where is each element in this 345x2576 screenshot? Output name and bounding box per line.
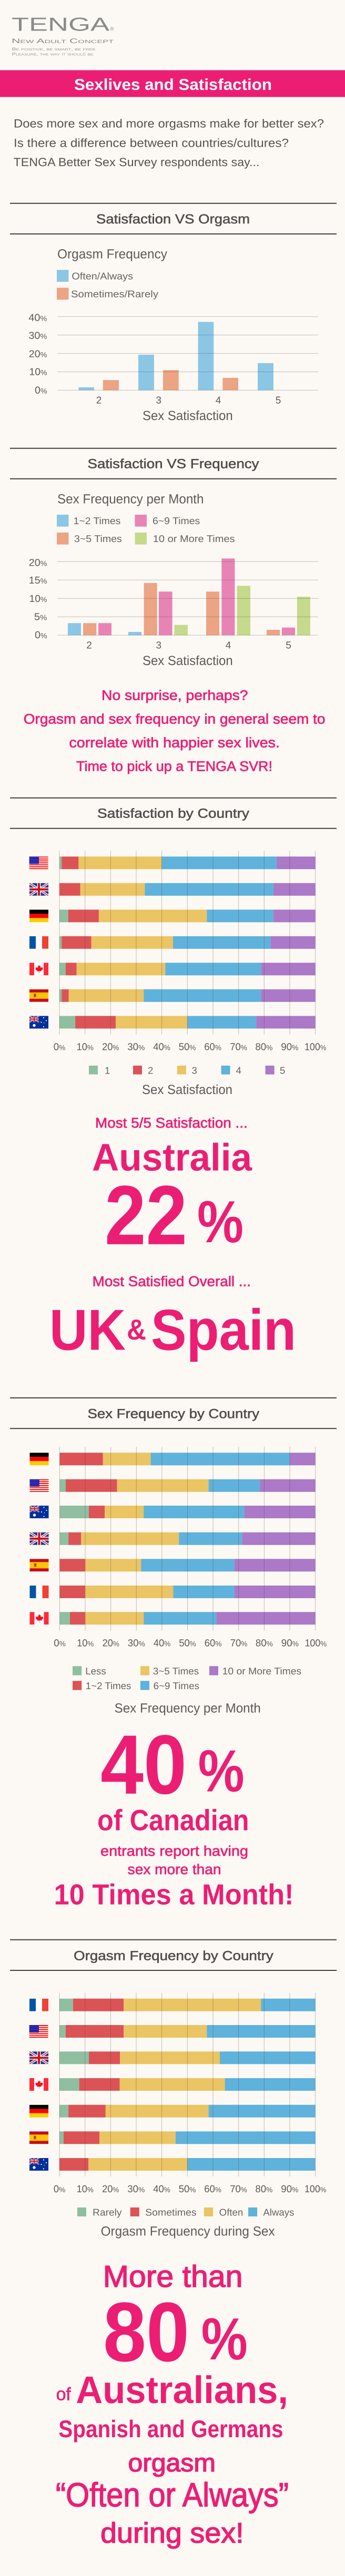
bar chart: 5% (34, 611, 47, 622)
intro text: TENGA Better Sex Survey respondents say... (14, 156, 260, 169)
callout: more than 80%: 80 (103, 2285, 189, 2379)
callout: 40% of Canadian: of Canadian (97, 1804, 249, 1837)
bar chart: 5 (286, 640, 291, 651)
callout: 40% of Canadian: 10 Times a Month! (54, 1878, 294, 1910)
axis labels: 70% (230, 1638, 247, 1649)
axis labels: 20% (102, 1042, 119, 1053)
callout: 40% of Canadian: % (198, 1738, 245, 1804)
callout: Australia 22%: % (197, 1189, 243, 1255)
legend: 10 or More Times (153, 533, 235, 544)
legend: 4 (236, 1065, 241, 1076)
stacked bar chart (29, 1993, 327, 2239)
bar chart: 40% (28, 313, 47, 324)
axis labels: 100% (305, 2184, 326, 2195)
row: Canada (29, 1612, 316, 1624)
legend: Orgasm Frequency (57, 247, 167, 262)
axis labels (54, 1638, 327, 1649)
logo: TENGA New Adult Concept: Be positive, be smart, be free (12, 47, 96, 52)
legend (73, 1665, 301, 1691)
bar chart: 0% (35, 385, 47, 396)
legend: Sometimes/Rarely (71, 289, 159, 300)
callout: 40% of Canadian (54, 1718, 294, 1910)
bar chart (28, 313, 318, 423)
callout: UK & Spain: & (127, 1313, 146, 1346)
axis labels: 50% (179, 2184, 196, 2195)
intro text: Does more sex and more orgasms make for better sex? (14, 117, 324, 130)
axis labels: 30% (128, 1638, 145, 1649)
row: Canada (29, 963, 316, 975)
axis labels: 10% (77, 2184, 94, 2195)
stacked bar chart (29, 1447, 327, 1716)
callout: 40% of Canadian: sex more than (128, 1862, 221, 1877)
callout: no surprise: Orgasm and sex frequency in general seem to (24, 711, 325, 727)
axis labels: 0% (54, 1042, 65, 1053)
axis labels: 60% (205, 1638, 221, 1649)
legend: Often (219, 2206, 243, 2217)
bar chart: 0% (35, 630, 47, 641)
legend: 5 (280, 1065, 285, 1076)
logo: TENGA New Adult Concept: New Adult Concept (12, 37, 114, 45)
axis labels: 100% (305, 1042, 326, 1053)
callout: UK & Spain: Most Satisfied Overall ... (93, 1274, 251, 1290)
axis labels: 30% (127, 1042, 145, 1053)
axis labels: 40% (153, 1042, 170, 1053)
bar chart (29, 558, 318, 668)
axis labels: 90% (281, 1042, 298, 1053)
heading: Sex Frequency by Country (87, 1406, 260, 1421)
row: Spain (29, 2131, 316, 2144)
axis labels: 40% (153, 2184, 170, 2195)
row: Australia (29, 1016, 316, 1028)
row: Spain (29, 989, 316, 1002)
callout: no surprise (24, 688, 325, 774)
callout: more than 80%: orgasm (128, 2449, 216, 2477)
callout: Australia 22%: Most 5/5 Satisfaction ... (95, 1115, 248, 1131)
bar chart: 3 (156, 395, 161, 406)
axis labels: 40% (154, 1638, 170, 1649)
panel: Satisfaction by Country (10, 806, 337, 1362)
callout: more than 80%: of (56, 2385, 71, 2405)
row: Germany (29, 909, 316, 922)
bar chart: 20% (29, 558, 47, 569)
axis labels: 70% (230, 1042, 247, 1053)
bar chart: 15% (29, 575, 47, 586)
callout: more than 80%: Australians, (76, 2369, 288, 2411)
row: UK (29, 2051, 316, 2064)
bar chart: 10% (29, 594, 47, 605)
legend: 1~2 Times (86, 1680, 131, 1691)
legend: 2 (148, 1065, 153, 1076)
row: UK (29, 1532, 316, 1545)
callout: no surprise: No surprise, perhaps? (102, 688, 248, 703)
heading: Orgasm Frequency by Country (74, 1948, 273, 1963)
callout: 40% of Canadian: 40 (100, 1718, 187, 1812)
intro text: Is there a difference between countries/cultures? (14, 136, 289, 149)
legend: 6~9 Times (153, 515, 200, 526)
row: France (29, 1586, 316, 1598)
stacked bar chart: Sex Frequency per Month (115, 1701, 261, 1716)
legend: Often/Always (72, 271, 133, 282)
callout: Australia 22%: Australia (92, 1137, 252, 1179)
legend (57, 247, 167, 300)
intro text (14, 117, 324, 169)
row: USA (29, 1479, 316, 1492)
stacked bar chart (29, 851, 327, 1097)
row: Australia (29, 1506, 316, 1518)
legend: Always (263, 2206, 294, 2217)
panel: Satisfaction VS Frequency (10, 457, 337, 668)
row: Germany (29, 2105, 316, 2118)
legend: Rarely (93, 2206, 122, 2217)
row: France (29, 1999, 316, 2011)
legend: 10 or More Times (222, 1665, 301, 1677)
heading: Satisfaction VS Orgasm (96, 212, 250, 227)
panel: Satisfaction VS Orgasm (10, 212, 337, 423)
logo: TENGA New Adult Concept: TENGA (12, 14, 109, 35)
axis labels: 80% (255, 1042, 272, 1053)
panel: Sex Frequency by Country (10, 1406, 337, 1910)
legend: 6~9 Times (154, 1680, 199, 1691)
callout: UK & Spain: UK (49, 1297, 126, 1362)
callout: more than 80%: Spanish and Germans (58, 2415, 283, 2442)
row: USA (29, 856, 316, 869)
bar chart: 4 (216, 395, 221, 406)
axis labels: 100% (305, 1638, 327, 1649)
legend (77, 2206, 294, 2217)
axis labels: 0% (54, 2184, 65, 2195)
axis labels: 10% (77, 1042, 94, 1053)
axis labels: 20% (103, 1638, 119, 1649)
bar chart: 5 (276, 395, 281, 406)
axis labels: 90% (281, 2184, 298, 2195)
legend: 3~5 Times (74, 533, 122, 544)
legend: 3~5 Times (153, 1665, 199, 1677)
legend: 3 (191, 1065, 197, 1076)
bar chart: Sex Satisfaction (143, 408, 233, 423)
bar chart: 3 (156, 640, 161, 651)
legend: Sex Frequency per Month (57, 492, 204, 507)
legend: 1 (105, 1065, 110, 1076)
callout: Australia 22%: 22 (105, 1168, 187, 1262)
legend (89, 1065, 285, 1076)
stacked bar chart: Orgasm Frequency during Sex (101, 2224, 275, 2239)
callout: more than 80%: % (201, 2306, 248, 2372)
row: Canada (29, 2078, 316, 2091)
axis labels: 10% (77, 1638, 94, 1649)
title banner: Sexlives and Satisfaction (74, 76, 272, 94)
logo: TENGA New Adult Concept: ® (110, 26, 114, 32)
logo: TENGA New Adult Concept (12, 14, 114, 57)
row: Germany (29, 1453, 316, 1465)
axis labels: 60% (204, 1042, 221, 1053)
row: Spain (29, 1559, 316, 1571)
logo: TENGA New Adult Concept: Pleasure, the way it should be (12, 52, 94, 57)
legend: 1~2 Times (74, 515, 120, 526)
axis labels: 30% (127, 2184, 145, 2195)
row: Australia (29, 2158, 316, 2171)
heading: Satisfaction by Country (97, 806, 250, 821)
axis labels (54, 1042, 326, 1053)
bar chart: 4 (226, 640, 231, 651)
axis labels: 80% (255, 2184, 272, 2195)
axis labels: 90% (281, 1638, 299, 1649)
bar chart: 30% (28, 330, 47, 341)
callout: UK & Spain (49, 1274, 296, 1362)
row: France (29, 936, 316, 949)
axis labels: 70% (230, 2184, 247, 2195)
bar chart: 20% (29, 349, 47, 360)
axis labels (54, 2184, 326, 2195)
axis labels: 20% (102, 2184, 119, 2195)
legend: Less (85, 1665, 106, 1677)
callout: 40% of Canadian: entrants report having (100, 1843, 248, 1859)
title banner (0, 70, 345, 97)
callout: no surprise: Time to pick up a TENGA SVR! (76, 759, 272, 774)
panel: Orgasm Frequency by Country (10, 1948, 337, 2549)
axis labels: 60% (204, 2184, 221, 2195)
callout: UK & Spain: Spain (151, 1297, 296, 1362)
row: UK (29, 883, 316, 896)
bar chart: 2 (86, 640, 92, 651)
axis labels: 80% (256, 1638, 273, 1649)
callout: more than 80%: More than (103, 2260, 243, 2294)
callout: more than 80%: “Often or Always” (56, 2476, 289, 2514)
axis labels: 50% (179, 1042, 196, 1053)
row: USA (29, 2025, 316, 2038)
stacked bar chart: Sex Satisfaction (142, 1082, 232, 1097)
axis labels: 50% (179, 1638, 196, 1649)
bar chart: 10% (29, 366, 47, 377)
heading: Satisfaction VS Frequency (87, 457, 259, 472)
bar chart: 2 (96, 395, 102, 406)
callout: more than 80%: during sex! (100, 2518, 244, 2549)
callout: Australia 22% (92, 1115, 252, 1262)
legend (57, 492, 235, 545)
callout: no surprise: correlate with happier sex lives. (69, 735, 280, 751)
bar chart: Sex Satisfaction (143, 653, 233, 668)
legend: Sometimes (145, 2206, 197, 2217)
axis labels: 0% (54, 1638, 66, 1649)
callout: more than 80% (56, 2260, 289, 2549)
